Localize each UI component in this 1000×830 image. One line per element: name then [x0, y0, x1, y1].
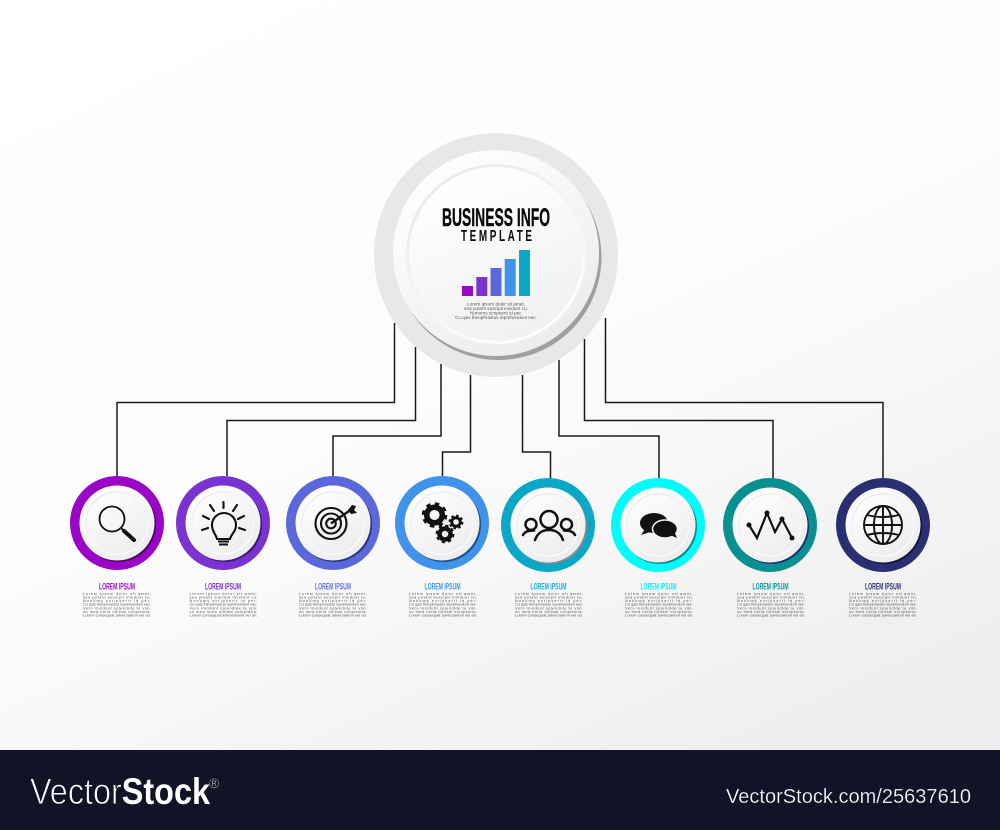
step 3: target [286, 476, 380, 618]
text block 4: sea putant suscipit invidunt cu, [409, 594, 477, 599]
text block 5: cu mea nulla nullam voluptaria. [515, 609, 583, 614]
text block 4: Lorem ipsum dolor sit amet, [409, 591, 477, 596]
text block 7: cu mea nulla nullam voluptaria. [737, 609, 805, 614]
hub description: Lorem ipsum dolor sit amet, [467, 302, 525, 306]
text block 3: Nonumy scripserit id per. [299, 598, 367, 603]
text block 6: cu mea nulla nullam voluptaria. [625, 609, 693, 614]
text block 8: Nonumy scripserit id per. [849, 598, 917, 603]
hub description: Nonumy scripserit id per. [470, 310, 522, 316]
text block 6: Lorem consequat adversarium vel an. [625, 613, 693, 618]
text block 5: Cu quis theophrastus reprehendunt nec. [515, 602, 583, 607]
label 8: LOREM IPSUM [865, 582, 901, 592]
label 7: LOREM IPSUM [752, 582, 789, 592]
text block 7: sea putant suscipit invidunt cu, [737, 594, 805, 599]
text block 7: Cu quis theophrastus reprehendunt nec. [737, 602, 805, 607]
label 1: LOREM IPSUM [99, 582, 135, 592]
text block 4: Nonumy scripserit id per. [409, 598, 477, 603]
text block 6: Vero invidunt splendide te vim, [625, 605, 693, 610]
text block 6: sea putant suscipit invidunt cu, [625, 594, 693, 599]
text block 8 [849, 591, 917, 618]
text block 1 [83, 591, 151, 618]
text block 8: Lorem ipsum dolor sit amet, [849, 591, 917, 596]
text block 4: Lorem consequat adversarium vel an. [409, 613, 477, 618]
text block 3: Lorem ipsum dolor sit amet, [299, 591, 367, 596]
icon: target [316, 505, 357, 539]
text block 2: Lorem ipsum dolor sit amet, [190, 591, 258, 596]
hub description: Cu quis theophrastus reprehendunt nec. [455, 315, 537, 320]
text block 1: Lorem consequat adversarium vel an. [83, 613, 151, 618]
label 2: LOREM IPSUM [205, 582, 241, 592]
text block 3 [299, 591, 367, 618]
text block 2: Cu quis theophrastus reprehendunt nec. [190, 602, 258, 607]
step 6: chat [611, 478, 705, 618]
text block 7: Lorem consequat adversarium vel an. [737, 613, 805, 618]
text block 7: Vero invidunt splendide te vim, [737, 605, 805, 610]
text block 1: cu mea nulla nullam voluptaria. [83, 609, 151, 614]
bar chart [462, 250, 530, 296]
text block 8: Cu quis theophrastus reprehendunt nec. [849, 602, 917, 607]
central hub [374, 133, 618, 377]
step 7: line chart [723, 478, 817, 618]
text block 5: sea putant suscipit invidunt cu, [515, 594, 583, 599]
text block 8: cu mea nulla nullam voluptaria. [849, 609, 917, 614]
text block 3: Lorem consequat adversarium vel an. [299, 613, 367, 618]
text block 7 [737, 591, 805, 618]
text block 1: Lorem ipsum dolor sit amet, [83, 591, 151, 596]
step 5: team [501, 478, 595, 618]
text block 4 [409, 591, 477, 618]
icon: gears [424, 504, 462, 542]
text block 1: sea putant suscipit invidunt cu, [83, 594, 151, 599]
icon: globe [864, 506, 902, 544]
icon: magnifier [100, 506, 134, 540]
text block 4: cu mea nulla nullam voluptaria. [409, 609, 477, 614]
text block 3: Vero invidunt splendide te vim, [299, 605, 367, 610]
step 2: idea [176, 476, 270, 618]
text block 2: Nonumy scripserit id per. [190, 598, 258, 603]
text block 5: Lorem ipsum dolor sit amet, [515, 591, 583, 596]
label 6: LOREM IPSUM [640, 582, 677, 592]
text block 2: sea putant suscipit invidunt cu, [190, 594, 258, 599]
text block 1: Nonumy scripserit id per. [83, 598, 151, 603]
text block 4: Cu quis theophrastus reprehendunt nec. [409, 602, 477, 607]
registered mark: ® [209, 775, 220, 791]
text block 7: Lorem ipsum dolor sit amet, [737, 591, 805, 596]
connector lines [117, 318, 883, 479]
subheading: template: TEMPLATE [461, 227, 532, 245]
text block 5: Nonumy scripserit id per. [515, 598, 583, 603]
label 3: LOREM IPSUM [315, 582, 351, 592]
hub description [455, 302, 537, 320]
text block 3: cu mea nulla nullam voluptaria. [299, 609, 367, 614]
footer id: VectorStock.com/25637610 [726, 786, 971, 808]
text block 6: Nonumy scripserit id per. [625, 598, 693, 603]
text block 8: Vero invidunt splendide te vim, [849, 605, 917, 610]
text block 3: sea putant suscipit invidunt cu, [299, 594, 367, 599]
hub description: sea putant suscipit invidunt cu. [464, 306, 528, 311]
text block 7: Nonumy scripserit id per. [737, 598, 805, 603]
footer band [0, 750, 1000, 830]
label 4: LOREM IPSUM [424, 582, 461, 592]
label 5: LOREM IPSUM [530, 582, 567, 592]
text block 2: Vero invidunt splendide te vim, [190, 605, 258, 610]
text block 6: Lorem ipsum dolor sit amet, [625, 591, 693, 596]
step 4: settings [395, 476, 489, 618]
icon: speech bubbles [640, 513, 678, 538]
icon: light bulb [202, 502, 245, 544]
text block 2 [190, 591, 258, 618]
text block 1: Vero invidunt splendide te vim, [83, 605, 151, 610]
text block 5: Vero invidunt splendide te vim, [515, 605, 583, 610]
step 8: globe [836, 478, 930, 618]
icon: zigzag line [746, 510, 794, 540]
text block 3: Cu quis theophrastus reprehendunt nec. [299, 602, 367, 607]
step 1: search [70, 476, 164, 618]
text block 4: Vero invidunt splendide te vim, [409, 605, 477, 610]
text block 6: Cu quis theophrastus reprehendunt nec. [625, 602, 693, 607]
text block 5 [515, 591, 583, 618]
footer logo: VectorStock [30, 771, 210, 812]
text block 6 [625, 591, 693, 618]
icon: people [523, 511, 575, 540]
text block 2: cu mea nulla nullam voluptaria. [190, 609, 258, 614]
text block 8: Lorem consequat adversarium vel an. [849, 613, 917, 618]
heading: business info: BUSINESS INFO [442, 204, 550, 232]
text block 2: Lorem consequat adversarium vel an. [190, 613, 258, 618]
text block 1: Cu quis theophrastus reprehendunt nec. [83, 602, 151, 607]
text block 8: sea putant suscipit invidunt cu, [849, 594, 917, 599]
text block 5: Lorem consequat adversarium vel an. [515, 613, 583, 618]
